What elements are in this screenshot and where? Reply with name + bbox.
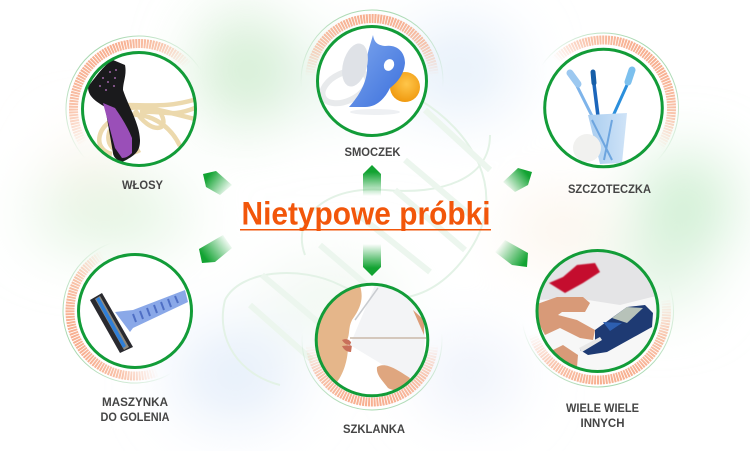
item: glucose meter [524,249,674,427]
decorative ring [301,10,443,152]
arrow: lower right [495,240,528,267]
label: SZCZOTECZKA [568,182,651,196]
decorative ring [39,215,231,407]
arrow: down [363,243,381,276]
photo: person drinking from a glass [318,286,426,390]
title: Nietypowe próbki [242,196,490,232]
decorative ring [498,2,709,214]
label: SMOCZEK [344,145,401,159]
item: hair [66,36,197,189]
DNA watermark [223,99,490,385]
item: toothbrushes [543,32,679,193]
item: pacifier [301,10,443,159]
arrow: upper right [503,168,532,192]
label: SZKLANKA [343,422,405,436]
label: WŁOSY [122,178,163,192]
label: WIELE WIELE [566,401,639,415]
photo: hairbrush with blonde hair [88,60,194,164]
decorative ring [302,270,442,410]
label: MASZYNKA [102,395,168,409]
decorative ring [37,7,241,211]
arrow: lower left [199,235,232,263]
photo: blood stain and glucose meter [538,252,654,366]
arrow: up [363,165,381,197]
decorative ring [504,218,691,404]
photo: toothbrushes in a cup [566,66,644,164]
item: razor: DO GOLENIA [100,410,170,424]
photo: razor [90,256,188,353]
arrow: upper left [203,171,232,195]
item: razor [62,246,193,421]
item: glucose meter: INNYCH [580,416,624,430]
photo: blue pacifier [319,35,425,126]
item: glass [302,270,442,436]
